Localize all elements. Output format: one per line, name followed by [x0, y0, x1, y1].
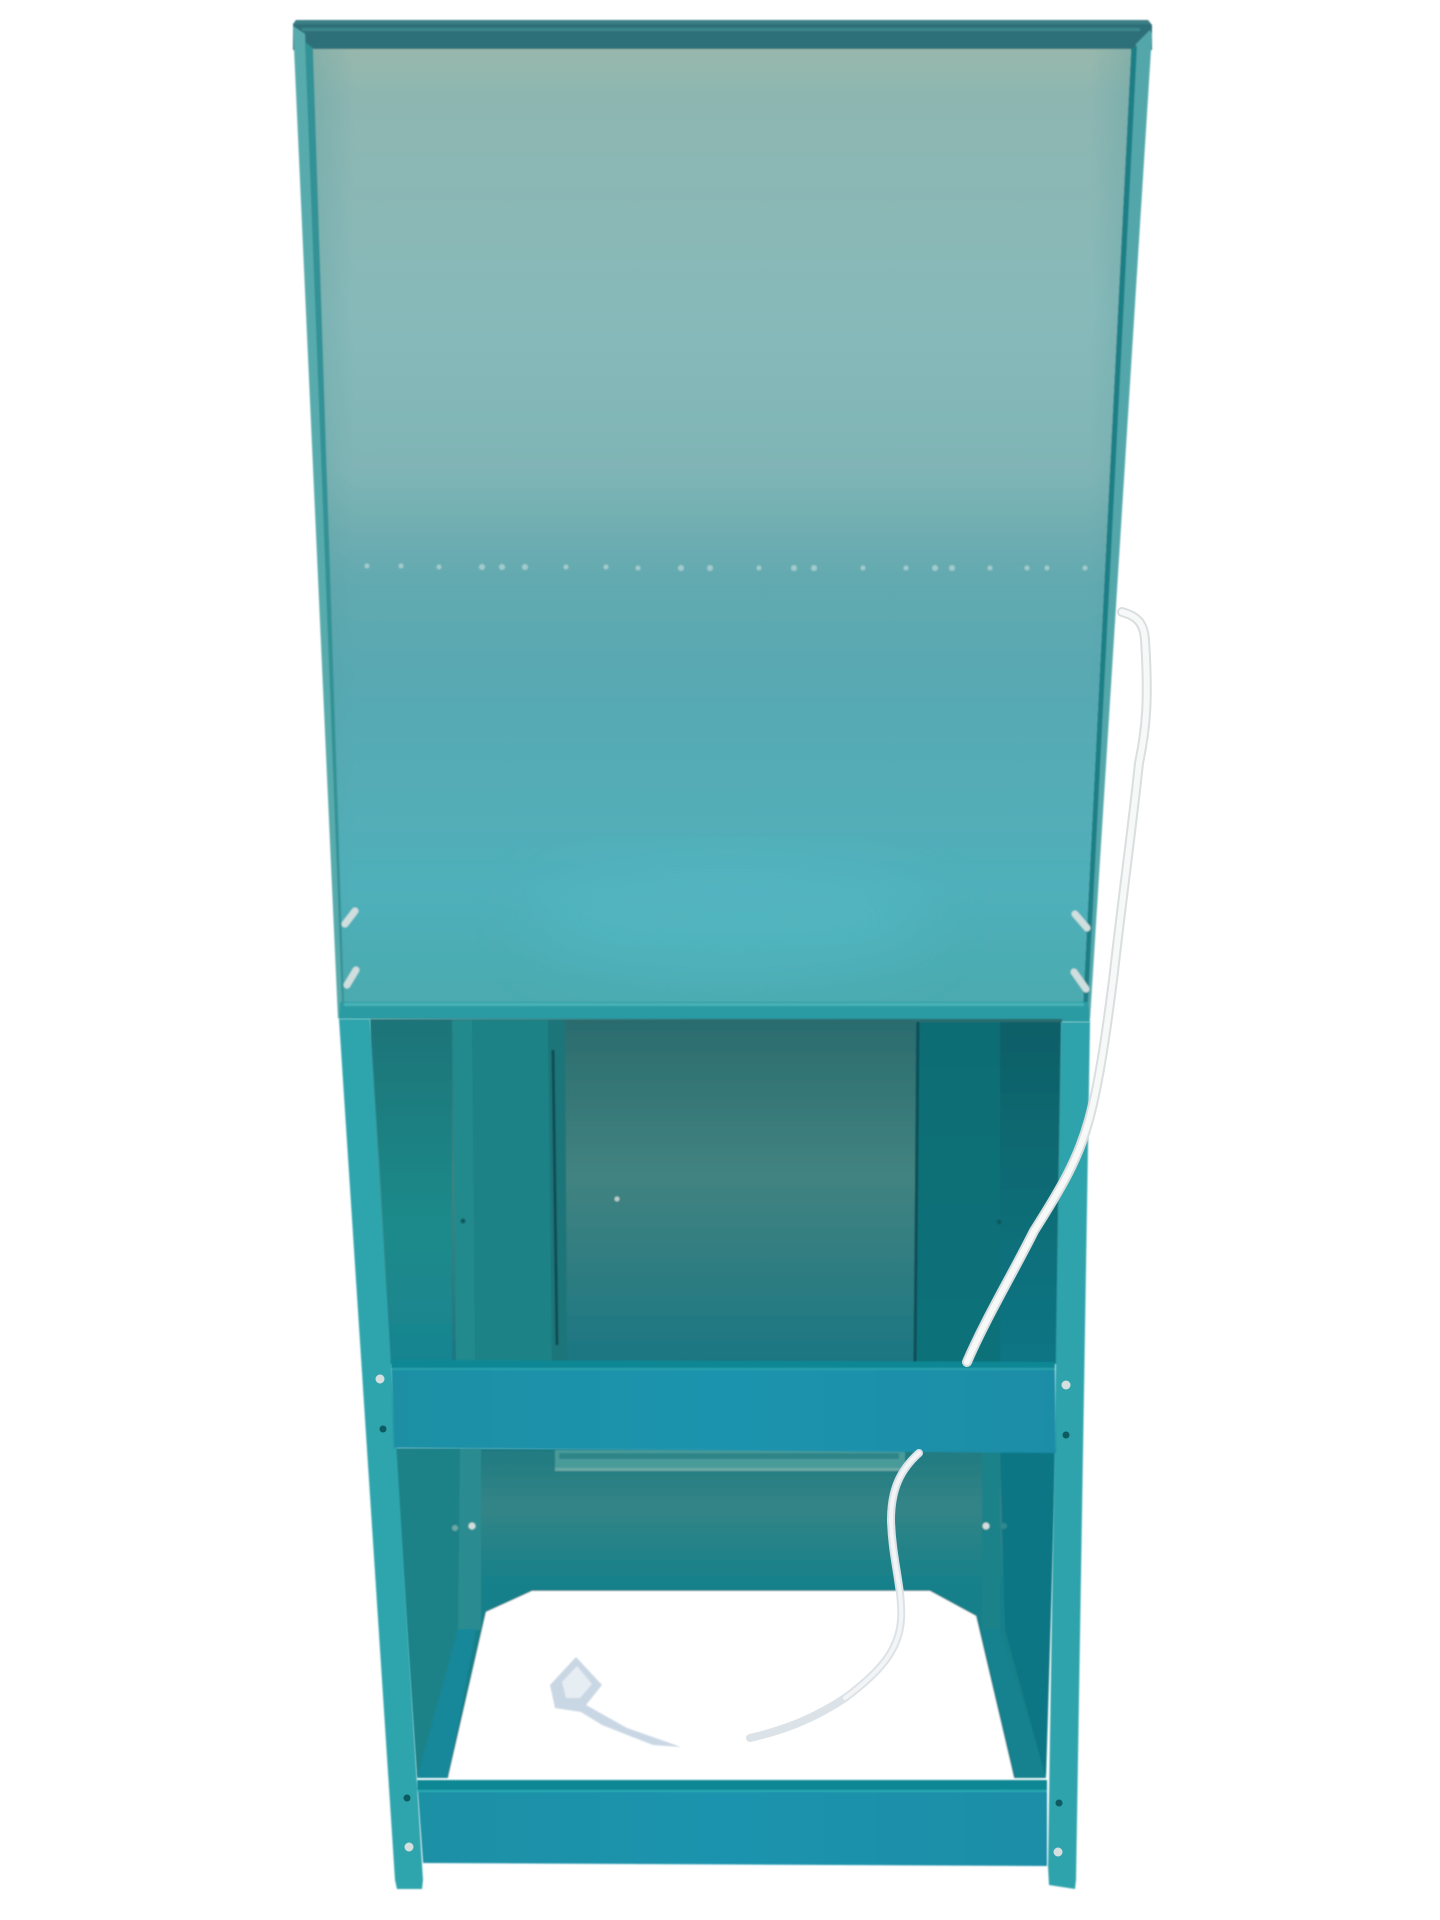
light sheet surface [313, 49, 1131, 1003]
power cord: lower run [750, 1453, 919, 1738]
panel: lower interior wall [394, 1448, 1056, 1778]
slider rail [555, 1450, 905, 1471]
mounting bolts [345, 911, 1087, 989]
right side wall [914, 1022, 1061, 1364]
left side wall [370, 1020, 452, 1364]
panel: upper interior window [370, 1019, 1062, 1364]
right side lower [1000, 1450, 1056, 1778]
lower crossbar [417, 1780, 1047, 1866]
top rim tray [293, 20, 1152, 50]
wall screws [460, 1218, 1002, 1224]
upper crossbar [391, 1360, 1056, 1453]
left leg [339, 1019, 423, 1889]
floor side rails [417, 1629, 476, 1778]
dimple row [364, 564, 1088, 571]
right rim [1084, 30, 1152, 1019]
right leg [1048, 1022, 1090, 1889]
power plug [550, 1657, 681, 1747]
left rim [293, 26, 345, 1019]
lower highlight [530, 860, 930, 980]
wall screws [452, 1522, 1007, 1531]
floor opening [448, 1591, 1014, 1778]
power cord: upper run [967, 612, 1147, 1362]
panel: upper rear panel [293, 20, 1152, 1022]
bottom lip [339, 1002, 1090, 1022]
centre slots [548, 1020, 567, 1364]
rivets [376, 1374, 1070, 1856]
back wall [370, 1019, 1062, 1364]
left side lower [394, 1448, 460, 1778]
